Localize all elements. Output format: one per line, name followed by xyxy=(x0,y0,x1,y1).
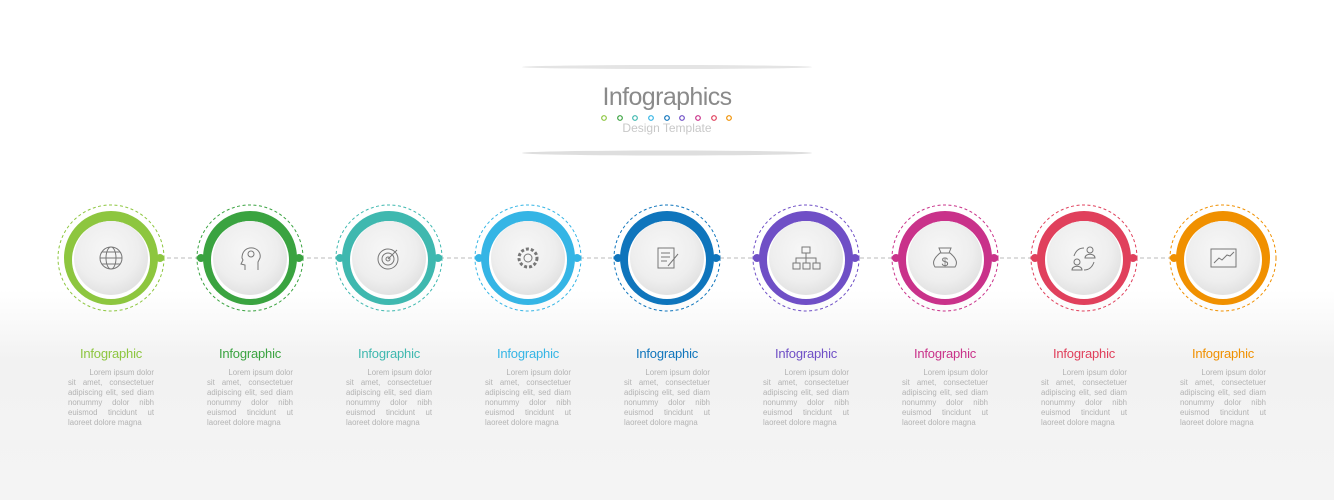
text column 4: laoreet dolore magna xyxy=(485,418,559,427)
text column 2: euismod tincidunt ut xyxy=(207,408,293,417)
text column 2: nonummy dolor nibh xyxy=(207,398,293,407)
text column 8: euismod tincidunt ut xyxy=(1041,408,1127,417)
text column 2: adipiscing elit, sed diam xyxy=(207,388,293,397)
text column 2: Lorem ipsum dolor xyxy=(228,368,293,377)
text column 3: sit amet, consectetuer xyxy=(346,378,432,387)
step 2 xyxy=(197,205,303,311)
text column 1: laoreet dolore magna xyxy=(68,418,142,427)
text column 7: euismod tincidunt ut xyxy=(902,408,988,417)
title block xyxy=(522,65,812,156)
text column 7: Lorem ipsum dolor xyxy=(923,368,988,377)
text column 1: sit amet, consectetuer xyxy=(68,378,154,387)
text column 1 xyxy=(68,346,154,427)
text column 2: sit amet, consectetuer xyxy=(207,378,293,387)
title text: Infographics xyxy=(602,83,732,111)
connectors xyxy=(160,257,1175,259)
text column 3: laoreet dolore magna xyxy=(346,418,420,427)
step 6 xyxy=(753,205,859,311)
text column 3: adipiscing elit, sed diam xyxy=(346,388,432,397)
text column 9: euismod tincidunt ut xyxy=(1180,408,1266,417)
text column 6: euismod tincidunt ut xyxy=(763,408,849,417)
text column 6: sit amet, consectetuer xyxy=(763,378,849,387)
text column 5: Lorem ipsum dolor xyxy=(645,368,710,377)
text column 7: adipiscing elit, sed diam xyxy=(902,388,988,397)
text column 9: Infographic xyxy=(1192,346,1254,361)
text column 4: nonummy dolor nibh xyxy=(485,398,571,407)
text column 1: Infographic xyxy=(80,346,142,361)
text column 8: nonummy dolor nibh xyxy=(1041,398,1127,407)
step 9 xyxy=(1170,205,1276,311)
text column 4: sit amet, consectetuer xyxy=(485,378,571,387)
text column 5: sit amet, consectetuer xyxy=(624,378,710,387)
text column 5: laoreet dolore magna xyxy=(624,418,698,427)
text column 7: nonummy dolor nibh xyxy=(902,398,988,407)
text column 3 xyxy=(346,346,432,427)
subtitle: Design Template xyxy=(622,121,712,135)
text column 4: Infographic xyxy=(497,346,559,361)
text column 5: Infographic xyxy=(636,346,698,361)
text column 5: nonummy dolor nibh xyxy=(624,398,710,407)
text column 6 xyxy=(763,346,849,427)
text column 1: Lorem ipsum dolor xyxy=(89,368,154,377)
text column 2 xyxy=(207,346,293,427)
step 8 xyxy=(1031,205,1137,311)
text column 9: adipiscing elit, sed diam xyxy=(1180,388,1266,397)
text column 8: Lorem ipsum dolor xyxy=(1062,368,1127,377)
text column 7: laoreet dolore magna xyxy=(902,418,976,427)
text column 2: Infographic xyxy=(219,346,281,361)
text column 5: adipiscing elit, sed diam xyxy=(624,388,710,397)
text column 9: nonummy dolor nibh xyxy=(1180,398,1266,407)
text column 8: laoreet dolore magna xyxy=(1041,418,1115,427)
step 7 xyxy=(892,205,998,311)
text column 3: Lorem ipsum dolor xyxy=(367,368,432,377)
text column 4 xyxy=(485,346,571,427)
text column 1: nonummy dolor nibh xyxy=(68,398,154,407)
text column 8: sit amet, consectetuer xyxy=(1041,378,1127,387)
text column 3: nonummy dolor nibh xyxy=(346,398,432,407)
text column 3: euismod tincidunt ut xyxy=(346,408,432,417)
text column 4: Lorem ipsum dolor xyxy=(506,368,571,377)
text column 6: adipiscing elit, sed diam xyxy=(763,388,849,397)
text column 9 xyxy=(1180,346,1266,427)
text column 8 xyxy=(1041,346,1127,427)
text column 3: Infographic xyxy=(358,346,420,361)
step 1 xyxy=(58,205,164,311)
text column 9: laoreet dolore magna xyxy=(1180,418,1254,427)
colored dots row xyxy=(601,115,732,121)
text column 6: Infographic xyxy=(775,346,837,361)
text column 5 xyxy=(624,346,710,427)
step 7: $ xyxy=(942,255,949,269)
text column 9: sit amet, consectetuer xyxy=(1180,378,1266,387)
text column 1: adipiscing elit, sed diam xyxy=(68,388,154,397)
text column 5: euismod tincidunt ut xyxy=(624,408,710,417)
text column 6: laoreet dolore magna xyxy=(763,418,837,427)
text column 7 xyxy=(902,346,988,427)
text column 8: adipiscing elit, sed diam xyxy=(1041,388,1127,397)
text column 7: sit amet, consectetuer xyxy=(902,378,988,387)
step 4 xyxy=(475,205,581,311)
text column 4: euismod tincidunt ut xyxy=(485,408,571,417)
step 3 xyxy=(336,205,442,311)
text column 7: Infographic xyxy=(914,346,976,361)
text column 9: Lorem ipsum dolor xyxy=(1201,368,1266,377)
text column 2: laoreet dolore magna xyxy=(207,418,281,427)
text column 1: euismod tincidunt ut xyxy=(68,408,154,417)
text column 6: nonummy dolor nibh xyxy=(763,398,849,407)
step 5 xyxy=(614,205,720,311)
text column 8: Infographic xyxy=(1053,346,1115,361)
text column 4: adipiscing elit, sed diam xyxy=(485,388,571,397)
text column 6: Lorem ipsum dolor xyxy=(784,368,849,377)
